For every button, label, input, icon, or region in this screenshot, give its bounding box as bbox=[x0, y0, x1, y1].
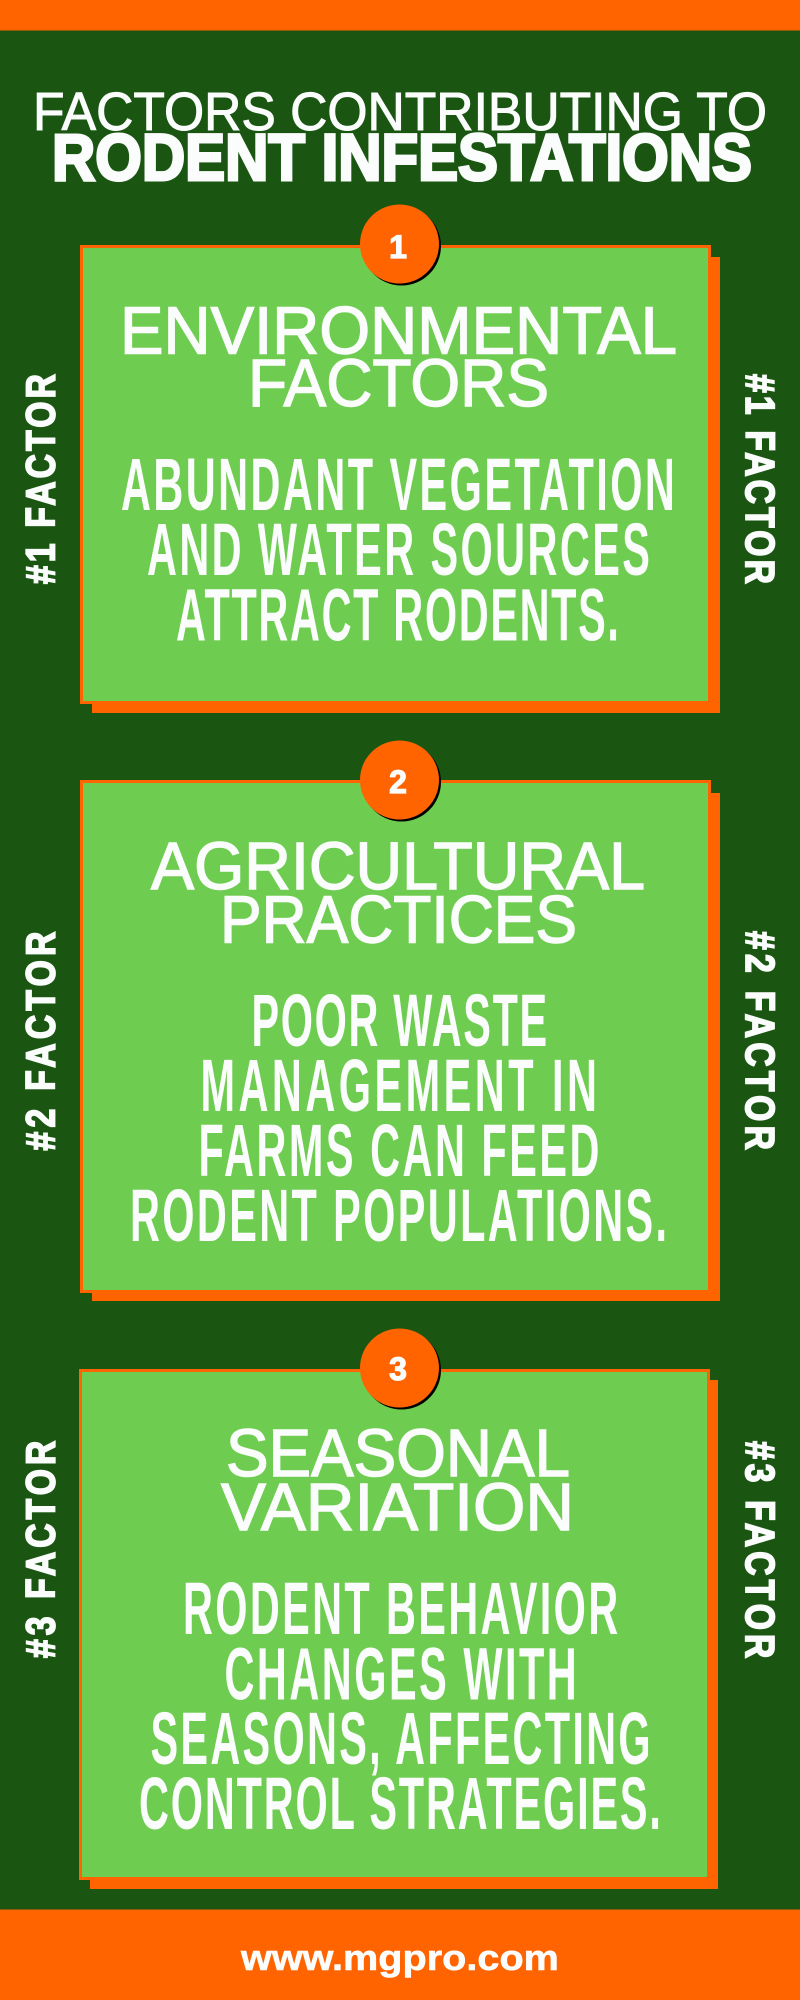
title: FACTORS CONTRIBUTING TO bbox=[33, 82, 767, 142]
number badge 3: 3 bbox=[389, 1351, 407, 1387]
heading: agricultural practices bbox=[151, 829, 645, 958]
body text: agricultural practices: MANAGEMENT IN bbox=[200, 1044, 597, 1127]
footer url: www.mgpro.com bbox=[240, 1939, 559, 1979]
heading: environmental factors: ENVIRONMENTAL bbox=[120, 294, 677, 368]
number badge 1: 1 bbox=[389, 229, 407, 265]
body text: agricultural practices bbox=[130, 979, 667, 1257]
body text: seasonal variation: RODENT BEHAVIOR bbox=[183, 1567, 618, 1650]
number badge 1 bbox=[360, 204, 441, 286]
side label right: #3 factor: #3 FACTOR bbox=[737, 1441, 783, 1658]
heading: environmental factors bbox=[120, 294, 677, 421]
side label left: #3 factor: #3 FACTOR bbox=[17, 1441, 63, 1658]
side label left: #1 factor: #1 FACTOR bbox=[17, 374, 63, 584]
body text: seasonal variation: SEASONS, AFFECTING bbox=[150, 1697, 651, 1780]
body text: agricultural practices: POOR WASTE bbox=[252, 979, 547, 1062]
title bbox=[33, 82, 767, 194]
body text: environmental factors: ATTRACT RODENTS. bbox=[176, 574, 619, 657]
panel: environmental factors bbox=[82, 204, 720, 713]
number badge 2 bbox=[360, 740, 441, 822]
number badge 2: 2 bbox=[389, 764, 407, 800]
side label right: #2 factor: #2 FACTOR bbox=[737, 931, 783, 1150]
heading: seasonal variation: SEASONAL bbox=[226, 1416, 570, 1491]
number badge 3 bbox=[360, 1328, 441, 1410]
heading: environmental factors: FACTORS bbox=[248, 346, 549, 421]
body text: environmental factors: ABUNDANT VEGETATION bbox=[121, 443, 675, 526]
side label right: #1 factor: #1 FACTOR bbox=[737, 374, 783, 584]
heading: agricultural practices: AGRICULTURAL bbox=[151, 829, 645, 904]
body text: seasonal variation bbox=[139, 1567, 661, 1845]
body text: seasonal variation: CHANGES WITH bbox=[224, 1633, 577, 1716]
body text: agricultural practices: FARMS CAN FEED bbox=[198, 1109, 599, 1192]
body text: environmental factors bbox=[121, 443, 675, 657]
side label left: #2 factor: #2 FACTOR bbox=[17, 932, 63, 1150]
body text: agricultural practices: RODENT POPULATIONS. bbox=[130, 1174, 667, 1257]
body text: environmental factors: AND WATER SOURCES bbox=[147, 508, 650, 591]
body text: seasonal variation: CONTROL STRATEGIES. bbox=[139, 1762, 661, 1845]
panel: seasonal variation bbox=[80, 1328, 718, 1889]
heading: agricultural practices: PRACTICES bbox=[220, 882, 577, 958]
footer bar bbox=[0, 1910, 800, 2000]
panel: agricultural practices bbox=[82, 740, 720, 1301]
heading: seasonal variation: VARIATION bbox=[221, 1470, 574, 1545]
heading: seasonal variation bbox=[221, 1416, 574, 1545]
top orange bar bbox=[0, 0, 800, 30]
